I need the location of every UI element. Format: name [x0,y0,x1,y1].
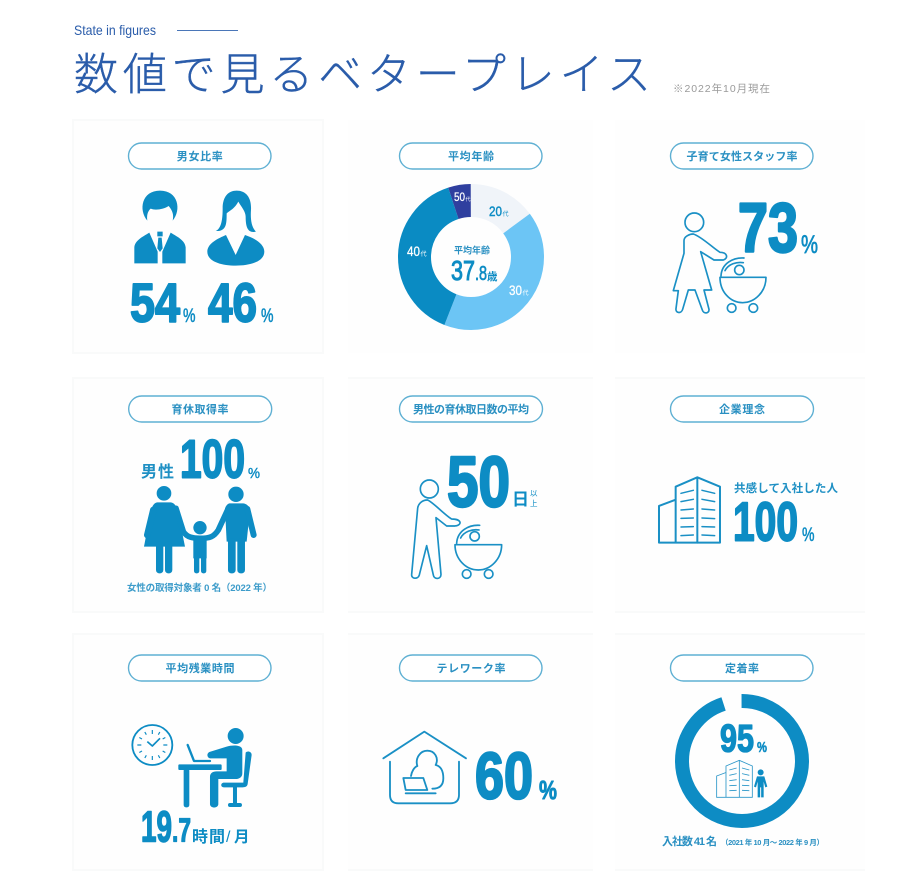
donut chart: age distribution [414,200,528,314]
note: number of hires: 入社数 41 名 [662,834,717,848]
label: 20s: 代 [502,210,509,218]
donut center: average age value [451,244,498,286]
stat: 100 percent: 100 [733,490,798,552]
icon: wall clock [132,725,172,765]
pill heading: corporate philosophy [670,396,814,422]
pill heading: parental leave rate: 育休取得率 [172,402,228,416]
pill heading: average overtime: 平均残業時間 [166,661,234,675]
stat: 54 percent: % [183,306,196,327]
panel: retention rate [615,634,865,870]
stat: 73 percent: 73 [738,188,798,266]
text: joined through empathy: 共感して入社した人 [734,481,838,495]
stat: 95 percent: 95 [720,718,754,760]
stat: 19.7 hours per month: .7 [172,812,191,848]
eyebrow: State in figures: State in figures [74,22,156,38]
stat: 54 percent: 54 [130,272,180,334]
pill heading: gender ratio: 男女比率 [177,149,223,163]
icon: person at desk [178,728,252,807]
stat: 73 percent: % [801,231,818,259]
label: 50s: 代 [466,196,471,203]
stat: 50 days or more: 上 [530,499,538,508]
stat: 50 days or more: 日 [512,490,529,509]
panel: average age [348,120,593,353]
icon: family [144,486,254,573]
ring chart: 95 percent [682,701,802,821]
panel: telework rate [348,634,593,870]
stat: men 100 percent: 男性 [141,462,174,481]
panel: average overtime [73,634,323,870]
icon: building and person [717,760,767,797]
stat: 19.7 hours per month: 月 [234,829,250,846]
pill heading: average leave days: 男性の育休取日数の平均 [413,402,529,416]
icon: person working in house [383,732,466,803]
pill heading: average age [400,143,542,169]
icon: father with stroller [412,480,502,578]
icon: woman [207,191,264,266]
label: 40s: 代 [420,250,427,258]
pill heading: average overtime [128,655,271,681]
pill heading: average age: 平均年齢 [448,149,494,163]
stat: 19.7 hours per month: 時間 [192,828,225,846]
panel: gender ratio [73,120,323,353]
label: 30s: 代 [522,289,529,297]
pill heading: retention rate [670,655,813,681]
date note: ※2022年10月現在 [673,82,770,95]
pill heading: telework rate: テレワーク率 [436,661,506,675]
label: 40s: 40 [407,244,420,259]
icon: man [134,191,186,263]
stat: 19.7 hours per month: / [226,829,231,846]
label: 30s: 30 [509,283,522,298]
panel: parental leave rate [73,378,323,612]
pill heading: gender ratio [128,143,271,169]
donut center: average age value: 歳 [487,270,498,283]
pill heading: working mother rate [670,143,813,169]
stat: 46 percent: 46 [208,272,257,334]
stat: 46 percent: % [261,306,274,327]
title: 数値で見るベタープレイス [74,50,651,100]
stat: men 100 percent: 100 [180,430,245,490]
pill heading: average leave days [400,396,542,422]
stat: 50 days or more: 50 [447,444,510,522]
stat: men 100 percent: % [248,465,260,482]
pill heading: working mother rate: 子育て女性スタッフ率 [686,149,798,163]
donut center: average age value: .8 [475,263,487,285]
panel: average leave days [348,378,593,612]
donut center: average age value: 平均年齢 [454,244,490,256]
panel: corporate philosophy [615,378,865,612]
stat: 60 percent: % [539,775,557,805]
panel: working mother rate [615,120,865,353]
stat: 100 percent: % [802,525,815,546]
stat: 95 percent: % [757,740,767,756]
pill heading: corporate philosophy: 企業理念 [719,402,765,416]
stat: 19.7 hours per month: 19 [141,802,172,852]
stat: 50 days or more: 以 [530,489,538,498]
donut center: average age value: 37 [451,255,475,286]
pill heading: telework rate [400,655,542,681]
stat: 19.7 hours per month [141,802,250,852]
label: 50s: 50 [454,190,465,204]
pill heading: parental leave rate [129,396,272,422]
stat: 60 percent: 60 [475,738,533,812]
stat: men 100 percent [141,430,260,490]
label: 20s: 20 [489,204,502,219]
icon: office building [659,477,720,543]
note: number of hires: （2021 年 10 月～ 2022 年 9 月） [721,837,824,847]
icon: mother with stroller [673,213,766,313]
pill heading: retention rate: 定着率 [725,661,759,675]
note: women eligible 0: 女性の取得対象者 0 名（2022 年） [127,582,272,594]
note: number of hires [662,834,824,848]
